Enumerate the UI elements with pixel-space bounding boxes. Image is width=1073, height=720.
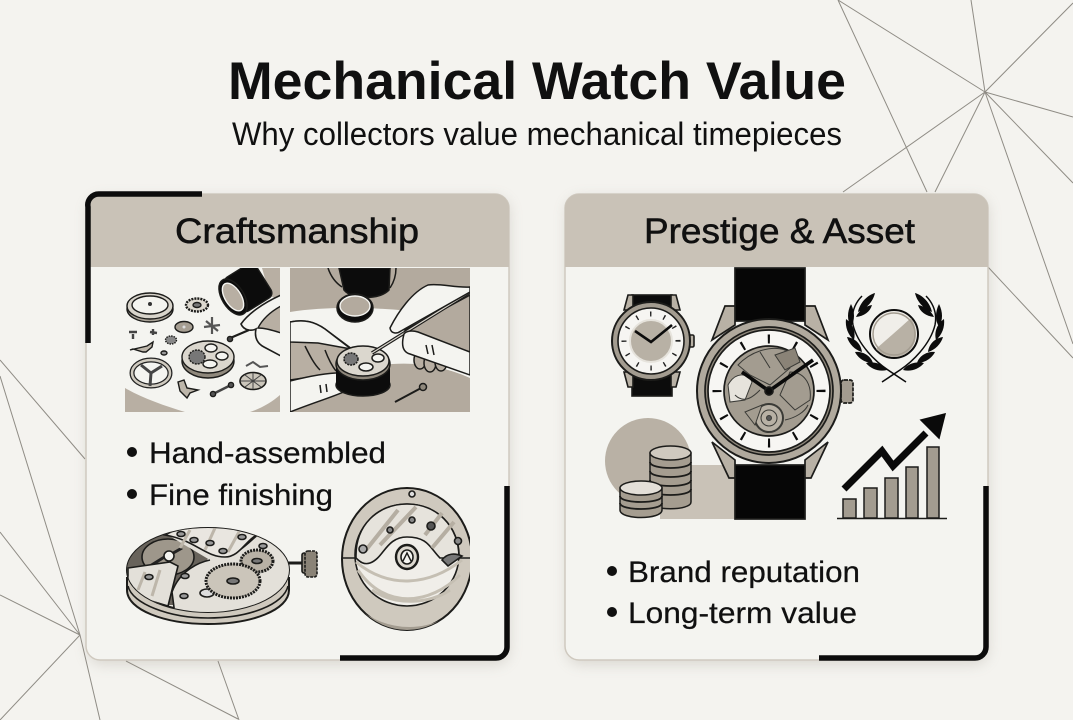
movement on holder	[335, 382, 391, 397]
bullet list: prestige and asset: Brand reputation	[628, 556, 860, 589]
illustration: watch parts laid out with loupe	[125, 261, 281, 412]
subtitle: Why collectors value mechanical timepieces	[232, 116, 842, 152]
chart: rising bars with arrow	[837, 414, 947, 518]
illustration: open movement with crown	[125, 525, 317, 624]
accent corners: craftsmanship	[88, 194, 507, 658]
loupe	[218, 268, 273, 316]
panel header: craftsmanship: Craftsmanship	[175, 212, 419, 251]
panel header: prestige and asset: Prestige & Asset	[644, 212, 915, 251]
illustration: hands assembling movement	[290, 268, 470, 412]
panel: prestige and asset	[565, 194, 988, 664]
illustration: automatic rotor	[342, 488, 472, 630]
icon: skeleton wristwatch	[697, 268, 853, 519]
bullet list: craftsmanship	[127, 437, 386, 512]
panel: craftsmanship	[86, 194, 509, 664]
loupe	[339, 268, 390, 298]
bullet list: prestige and asset	[607, 556, 860, 630]
title: Mechanical Watch Value	[228, 52, 846, 111]
bullet list: craftsmanship: Hand-assembled	[149, 437, 386, 470]
hand with tweezers	[241, 295, 281, 356]
accent corner: prestige and asset	[819, 486, 986, 658]
panel header: prestige and asset	[565, 194, 988, 267]
bullet list: prestige and asset: Long-term value	[628, 597, 857, 630]
icon: coins	[605, 418, 735, 519]
icon: small wristwatch	[612, 295, 694, 396]
right hand with tweezers	[405, 295, 470, 352]
icon: laurel wreath with medal	[846, 293, 944, 382]
panel header: craftsmanship	[86, 194, 509, 267]
left hand	[290, 321, 352, 380]
bullet list: craftsmanship: Fine finishing	[149, 479, 333, 512]
